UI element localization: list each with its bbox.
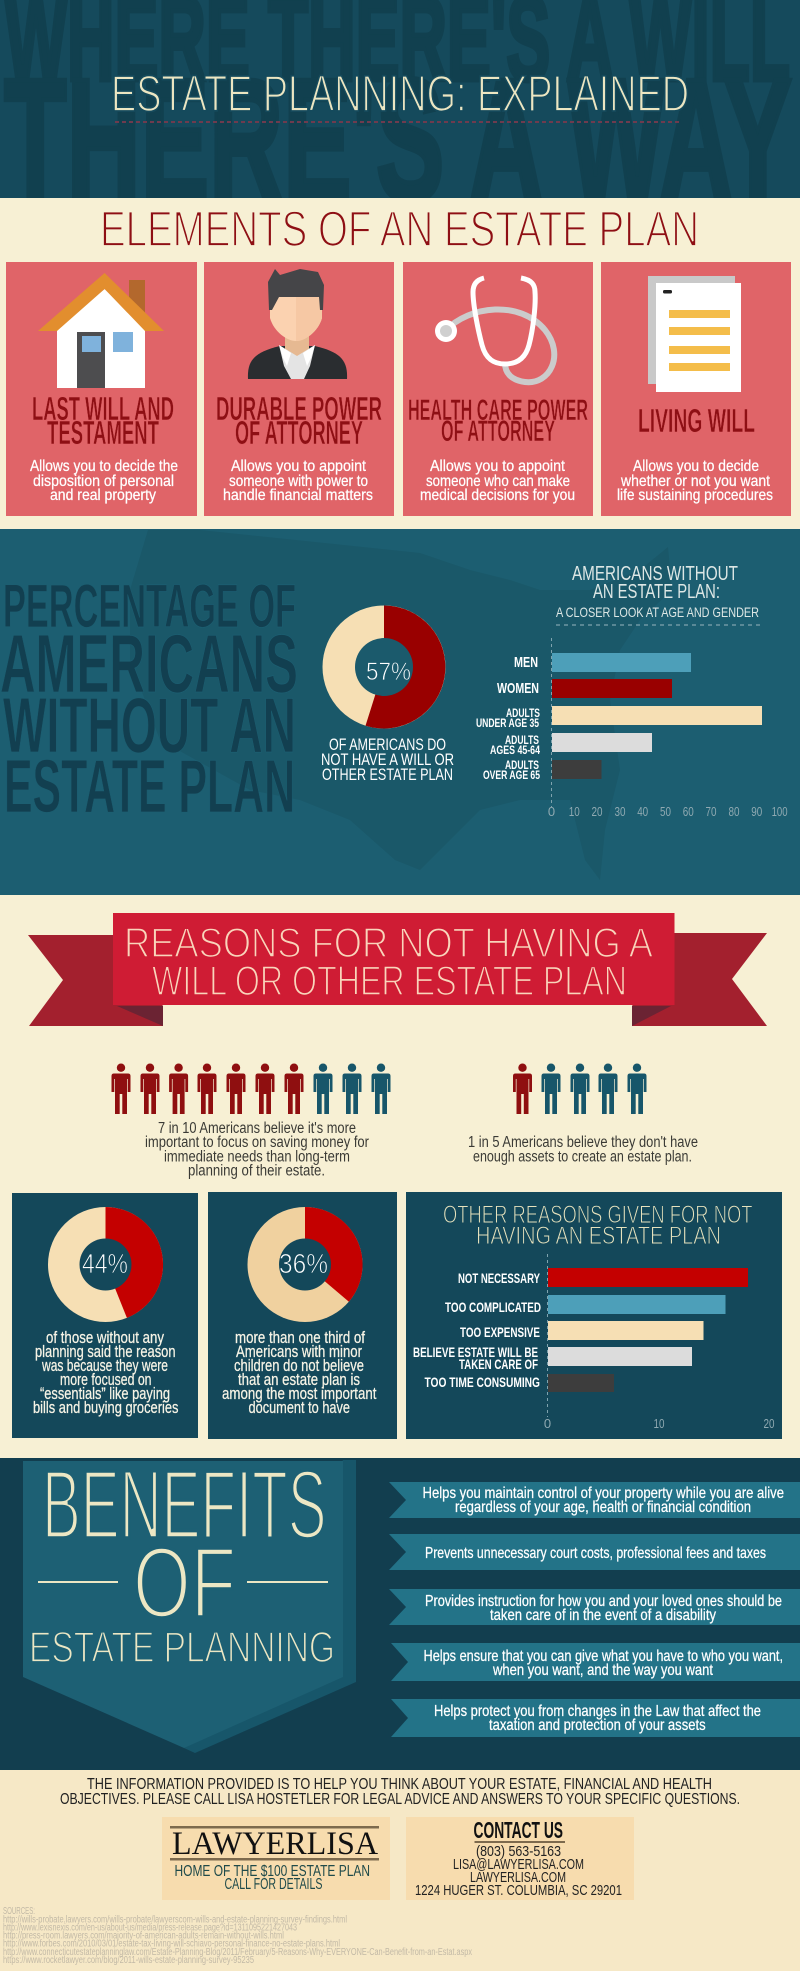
contact details [415, 1843, 622, 1899]
icon: person [248, 269, 347, 379]
axis numbers: 50 [660, 804, 671, 819]
bar labels: UNDER AGE 35 [476, 716, 539, 730]
panel: 36% minor children [208, 1192, 397, 1439]
panel: durable power of attorney [204, 262, 394, 516]
panel: last will and testament [6, 262, 197, 516]
panel text: bills and buying groceries [33, 1399, 178, 1417]
ribbon: provides instruction: taken care of in the event of a disability [490, 1607, 716, 1624]
contact box [406, 1817, 634, 1900]
axis numbers: 90 [751, 804, 762, 819]
text: 7 in 10 americans: 7 in 10 Americans believe it's more [158, 1120, 356, 1137]
panel: other reasons [406, 1192, 782, 1439]
card description: life sustaining procedures [617, 487, 773, 504]
donut chart: 36%: 36% [279, 1248, 328, 1279]
bar labels [476, 654, 540, 782]
disclaimer [60, 1776, 740, 1808]
section: header [0, 0, 800, 237]
chart heading [556, 563, 759, 620]
axis numbers: 40 [637, 804, 648, 819]
panel: living will [601, 262, 791, 516]
panel text: more focused on [60, 1371, 152, 1389]
bar labels [413, 1270, 541, 1390]
big heading: WITHOUT AN [3, 681, 296, 769]
icon: stethoscope [435, 278, 554, 382]
card description [617, 458, 773, 504]
section: percentage of americans [0, 529, 800, 895]
card title: LAST WILL AND [32, 390, 174, 427]
card description [223, 458, 373, 504]
donut caption [321, 735, 454, 784]
panel text: “essentials” like paying [40, 1385, 170, 1403]
text: 7 in 10 americans: important to focus on saving money for [145, 1134, 369, 1151]
icon: house [38, 273, 164, 388]
card title [408, 394, 588, 448]
axis numbers: 10 [569, 804, 580, 819]
card title: OF ATTORNEY [441, 415, 555, 448]
bar chart: americans without an estate plan [476, 638, 788, 819]
card description: handle financial matters [223, 487, 373, 504]
heading: benefits of estate planning: BENEFITS [42, 1450, 326, 1559]
tagline: CALL FOR DETAILS [224, 1876, 322, 1893]
shield [23, 1460, 356, 1753]
logo box [162, 1817, 390, 1900]
panel heading: HAVING AN ESTATE PLAN [476, 1222, 721, 1250]
ribbon: provides instruction [389, 1589, 800, 1625]
axis numbers: 10 [654, 1416, 664, 1431]
ribbon: helps protect: taxation and protection of your assets [489, 1717, 706, 1734]
panel text: was because they were [41, 1357, 168, 1375]
bar labels: TOO COMPLICATED [445, 1299, 541, 1315]
axis numbers: 60 [683, 804, 694, 819]
bar labels: ADULTS [505, 733, 539, 747]
chart heading: AN ESTATE PLAN: [593, 581, 720, 603]
big heading: ESTATE PLAN [4, 744, 295, 828]
icon: document [648, 276, 741, 392]
text: 1 in 5 americans: enough assets to create an estate plan. [473, 1148, 692, 1166]
text: 7 in 10 americans: planning of their estate. [188, 1162, 325, 1180]
contact details: LISA@LAWYERLISA.COM [453, 1856, 584, 1873]
logo: LAWYERLISA [172, 1826, 378, 1862]
text: 7 in 10 americans: immediate needs than long-term [164, 1148, 350, 1166]
contact heading: CONTACT US [474, 1817, 563, 1843]
panel text: of those without any [46, 1329, 165, 1347]
bar labels: OVER AGE 65 [483, 768, 540, 782]
donut chart: 57% [322, 606, 446, 728]
ribbon banner: reasons [28, 913, 767, 1026]
card description: and real property [50, 487, 156, 504]
card description: Allows you to appoint [231, 458, 366, 475]
panel text: that an estate plan is [238, 1371, 360, 1389]
card title [32, 390, 174, 451]
axis numbers: 20 [592, 804, 602, 819]
donut chart: 44%: 44% [82, 1248, 128, 1279]
panel: health care power of attorney [403, 262, 593, 516]
ribbon: helps ensure: when you want, and the way you want [492, 1662, 713, 1679]
card title: DURABLE POWER [216, 390, 382, 427]
panel text: Americans with minor [236, 1343, 362, 1361]
section: benefits [0, 1450, 800, 1770]
axis numbers: 0 [548, 804, 555, 819]
ribbon: helps protect [391, 1699, 800, 1737]
map of the united states [130, 530, 672, 880]
card title: TESTAMENT [47, 414, 159, 451]
bar labels: ADULTS [506, 706, 540, 720]
bar labels: TOO TIME CONSUMING [424, 1374, 540, 1390]
card description [30, 458, 178, 504]
sources: http://www.forbes.com/2010/03/01/estate-tax-living-will-schiavo-personal-finance-no-estate-plans.html [3, 1939, 340, 1950]
card description: someone who can make [426, 473, 570, 490]
sources: https://www.rocketlawyer.com/blog/2011-wills-estate-planning-survey-95235 [3, 1955, 254, 1966]
section: reasons background [0, 895, 800, 1458]
tagline [174, 1863, 370, 1893]
axis numbers: 100 [772, 804, 788, 819]
donut caption: NOT HAVE A WILL OR [321, 750, 454, 769]
tagline: HOME OF THE $100 ESTATE PLAN [174, 1863, 370, 1880]
banner heading [124, 919, 653, 1004]
card description: medical decisions for you [420, 487, 575, 504]
ribbon: helps ensure [391, 1643, 800, 1681]
panel text [222, 1329, 377, 1417]
axis numbers: 20 [764, 1416, 774, 1431]
big heading [0, 572, 298, 828]
text: 1 in 5 americans: 1 in 5 Americans believe they don't have [468, 1134, 698, 1151]
sources: http://www.lexisnexis.com/en-us/about-us/media/press-release.page?id=1311095221427043 [3, 1923, 297, 1934]
donut chart: 44% [48, 1207, 163, 1322]
sources: http://press-room.lawyers.com/majority-of-american-adults-remain-without-wills.html [3, 1931, 284, 1942]
bar labels: WOMEN [497, 680, 539, 697]
contact details: LAWYERLISA.COM [470, 1869, 566, 1886]
heading: benefits of estate planning: OF [133, 1527, 236, 1639]
card description: disposition of personal [33, 473, 174, 490]
big heading: AMERICANS [0, 617, 298, 710]
axis numbers [548, 804, 788, 819]
card description: Allows you to decide the [30, 458, 178, 475]
sources: http://www.connecticutestateplanninglaw.com/Estate-Planning-Blog/2011/February/5-Reasons-Why-EVERYONE-Can-Benefit-from-an-Estat.aspx [3, 1947, 472, 1958]
ribbon: prevents costs [389, 1534, 800, 1570]
panel text [33, 1329, 178, 1417]
axis numbers: 30 [614, 804, 626, 819]
pictogram: 7 in 10 [112, 1064, 390, 1114]
card title [216, 390, 382, 451]
text: 7 in 10 americans [145, 1120, 369, 1180]
big heading: PERCENTAGE OF [3, 572, 296, 640]
axis numbers: 80 [728, 804, 740, 819]
card description [420, 458, 575, 504]
sources: http://wills-probate.lawyers.com/wills-probate/lawyerscom-wills-and-estate-planning-survey-findings.html [3, 1915, 347, 1926]
contact details: (803) 563-5163 [476, 1843, 561, 1860]
pictogram: 1 in 5 [513, 1064, 646, 1114]
bar chart: other reasons [413, 1254, 774, 1431]
panel text: among the most important [222, 1385, 377, 1403]
card description: Allows you to decide [633, 458, 759, 475]
panel heading [443, 1201, 752, 1250]
axis numbers: 70 [706, 804, 716, 819]
card description: whether or not you want [620, 473, 770, 490]
bar labels: TAKEN CARE OF [459, 1356, 538, 1372]
card description: someone with power to [229, 473, 368, 490]
card title: HEALTH CARE POWER [408, 394, 588, 427]
banner heading: REASONS FOR NOT HAVING A [124, 919, 653, 966]
bar labels: NOT NECESSARY [458, 1270, 540, 1286]
section: footer [0, 1770, 800, 1971]
contact details: 1224 HUGER ST. COLUMBIA, SC 29201 [415, 1882, 622, 1899]
text: 1 in 5 americans [468, 1134, 698, 1166]
donut caption: OF AMERICANS DO [329, 735, 446, 754]
bar labels: MEN [514, 654, 538, 671]
heading: benefits of estate planning: ESTATE PLANNING [29, 1623, 335, 1672]
ribbon: maintain control [389, 1482, 800, 1518]
sources: SOURCES: [3, 1906, 35, 1917]
panel text: planning said the reason [35, 1343, 176, 1361]
card title: OF ATTORNEY [235, 414, 363, 451]
donut chart: 57%: 57% [366, 658, 411, 686]
axis numbers [544, 1416, 774, 1431]
card description: Allows you to appoint [430, 458, 565, 475]
panel text: document to have [248, 1399, 350, 1417]
section: elements background [0, 198, 800, 529]
axis numbers: 0 [544, 1416, 551, 1431]
bar labels: AGES 45-64 [490, 743, 540, 757]
donut chart: 36% [248, 1207, 363, 1322]
banner heading: WILL OR OTHER ESTATE PLAN [152, 957, 627, 1004]
panel text: more than one third of [235, 1329, 365, 1347]
sources [3, 1906, 472, 1966]
panel text: children do not believe [234, 1357, 364, 1375]
donut caption: OTHER ESTATE PLAN [322, 765, 453, 784]
panel: 44% essentials [12, 1193, 198, 1438]
chart heading: AMERICANS WITHOUT [572, 563, 738, 585]
bar labels: BELIEVE ESTATE WILL BE [413, 1344, 538, 1360]
bar labels: ADULTS [505, 758, 539, 772]
heading: benefits of estate planning [29, 1450, 335, 1672]
bar labels: TOO EXPENSIVE [460, 1324, 540, 1340]
